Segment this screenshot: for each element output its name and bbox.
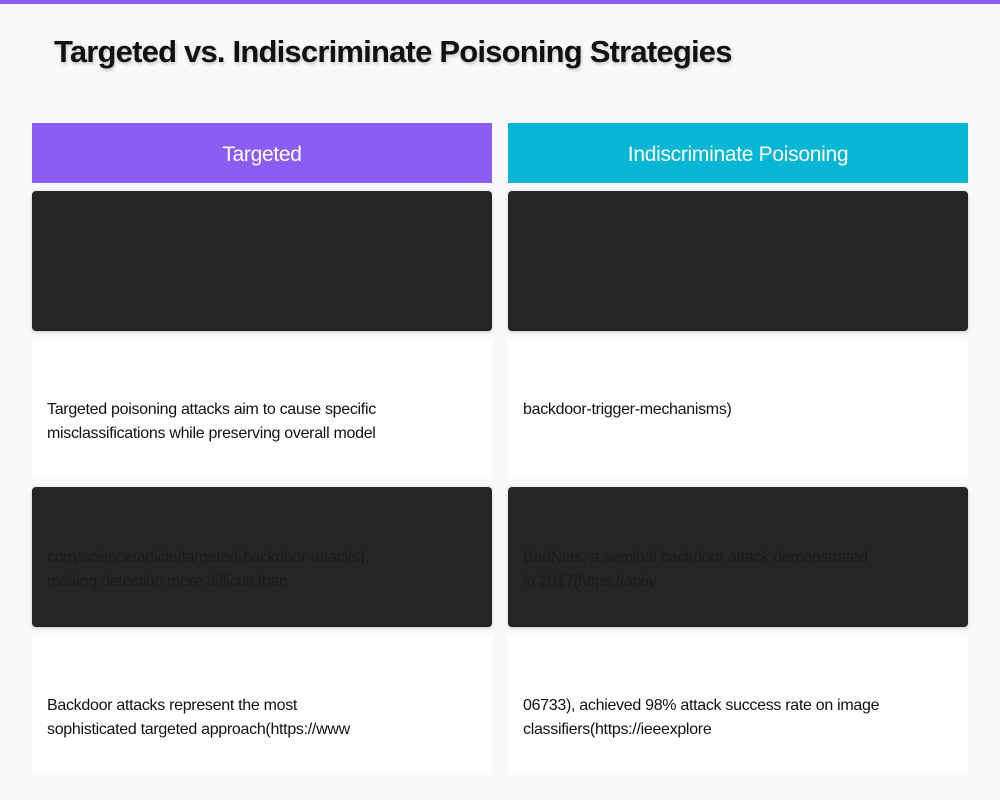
header: targeted: Targeted xyxy=(222,143,302,166)
header: indiscriminate xyxy=(508,123,968,183)
header: targeted xyxy=(32,123,492,183)
panel: targeted text 2 xyxy=(32,635,492,775)
panel: targeted dark 1 xyxy=(32,191,492,331)
panel: indiscriminate dark 1 xyxy=(508,191,968,331)
panel: targeted dark 2 xyxy=(32,487,492,627)
panel: targeted dark 2: com/science/article/targeted-backdoor-attacks), making detection more difficult than xyxy=(47,549,369,590)
panel: indiscriminate text 2: 06733), achieved 98% attack success rate on image classifiers(https://ieeexplore xyxy=(523,697,879,738)
panel: indiscriminate text 1 xyxy=(508,339,968,479)
panel: targeted text 2: Backdoor attacks represent the most sophisticated targeted approach(https://www xyxy=(47,697,350,738)
panel: indiscriminate text 2 xyxy=(508,635,968,775)
title: Targeted vs. Indiscriminate Poisoning Strategies xyxy=(54,34,732,69)
panel: targeted text 1 xyxy=(32,339,492,479)
panel: indiscriminate dark 2 xyxy=(508,487,968,627)
panel: targeted text 1: Targeted poisoning attacks aim to cause specific misclassifications while preserving overall model xyxy=(47,401,376,442)
panel: indiscriminate text 1: backdoor-trigger-mechanisms) xyxy=(523,401,732,418)
header: indiscriminate: Indiscriminate Poisoning xyxy=(628,143,848,166)
panel: indiscriminate dark 2: BadNets, a seminal backdoor attack demonstrated in 2017(https://arxiv xyxy=(523,549,867,590)
